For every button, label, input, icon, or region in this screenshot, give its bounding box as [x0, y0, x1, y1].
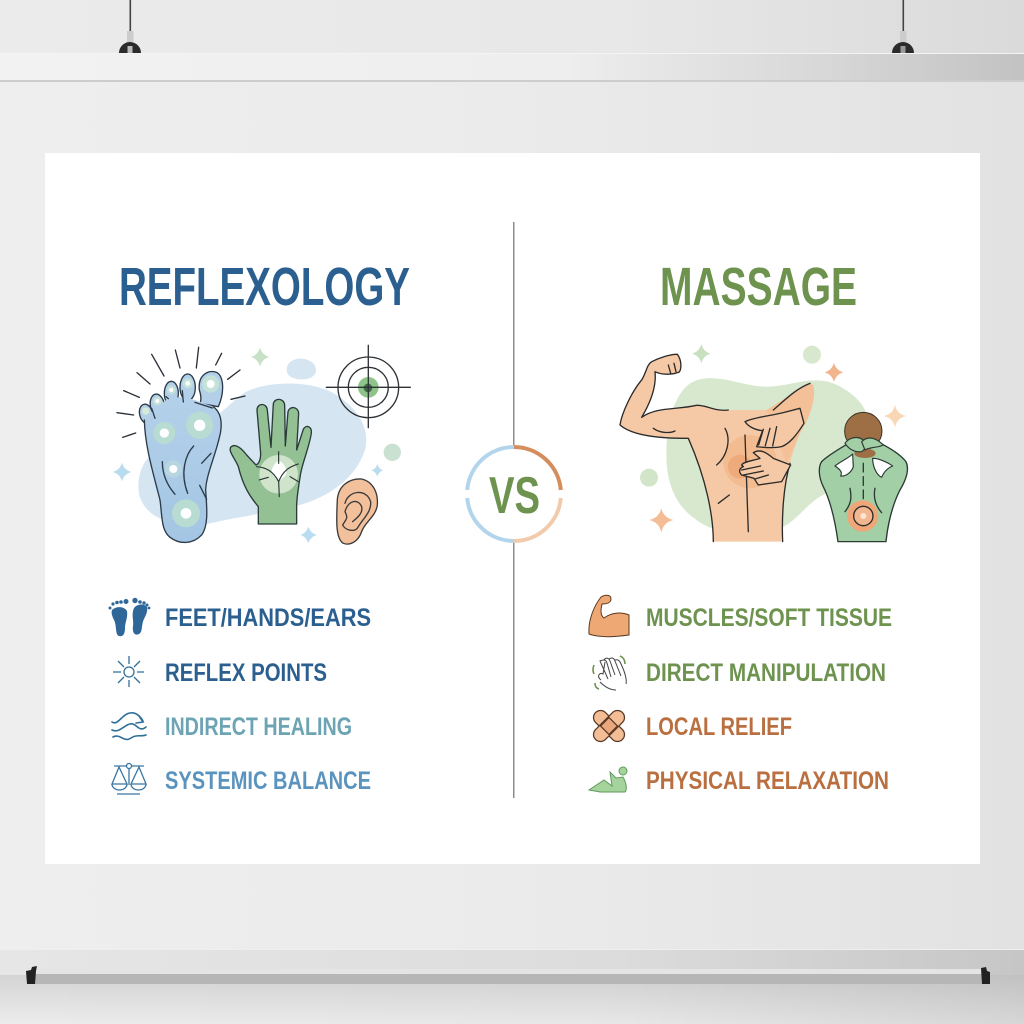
bottom rail assembly — [0, 949, 1024, 1024]
panel: massage — [589, 257, 907, 795]
person from behind — [819, 412, 907, 542]
icon: footprints — [108, 598, 150, 636]
list item: direct manipulation — [593, 656, 886, 690]
illustration: blobs, hand, ear and target — [113, 345, 410, 544]
list item: local relief — [591, 708, 792, 744]
radiating lines — [117, 347, 245, 437]
label: REFLEX POINTS — [165, 659, 327, 687]
top rail — [0, 53, 1024, 82]
list item: physical relaxation — [589, 767, 889, 795]
list item: indirect healing — [112, 713, 352, 741]
icon: flexed arm — [589, 595, 629, 637]
sole — [142, 375, 221, 542]
top hanger left — [119, 0, 141, 53]
icon: crossed bandage — [591, 708, 627, 744]
small blob — [287, 359, 316, 379]
heading: massage: MASSAGE — [660, 257, 857, 317]
hand — [230, 399, 311, 524]
poster panel — [45, 153, 980, 864]
list item: reflex points — [113, 656, 327, 687]
sparkles and dots — [113, 347, 401, 543]
background blob — [138, 384, 366, 525]
center divider line — [513, 222, 514, 798]
label: MUSCLES/SOFT TISSUE — [646, 604, 892, 632]
top wall strip — [0, 0, 1024, 54]
icon: waves — [112, 713, 146, 739]
icon: moving hand — [593, 656, 626, 690]
illustration: foot with reflex points — [117, 347, 245, 542]
label: INDIRECT HEALING — [165, 713, 352, 741]
list item: systemic balance — [112, 764, 371, 795]
label: DIRECT MANIPULATION — [646, 659, 886, 687]
label: PHYSICAL RELAXATION — [646, 767, 889, 795]
panel: reflexology — [108, 257, 410, 795]
target — [326, 345, 410, 428]
icon: scales — [112, 764, 146, 794]
background blob — [666, 378, 867, 533]
icon: reflex sun — [113, 656, 144, 687]
label: LOCAL RELIEF — [646, 713, 792, 741]
illustration: massaged back and person — [620, 344, 907, 542]
label: FEET/HANDS/EARS — [165, 604, 371, 632]
sparkles and dots — [640, 344, 906, 533]
ear — [337, 479, 377, 544]
top hanger right — [892, 0, 914, 53]
list item: muscles/soft tissue — [589, 595, 892, 637]
list item: feet/hands/ears — [108, 598, 371, 636]
heading: reflexology: REFLEXOLOGY — [119, 257, 410, 317]
label: SYSTEMIC BALANCE — [165, 767, 371, 795]
icon: reclining figure — [589, 767, 627, 792]
muscular figure — [620, 354, 814, 542]
toes — [137, 372, 223, 425]
vs badge — [467, 447, 561, 541]
vs text: VS — [489, 467, 540, 525]
